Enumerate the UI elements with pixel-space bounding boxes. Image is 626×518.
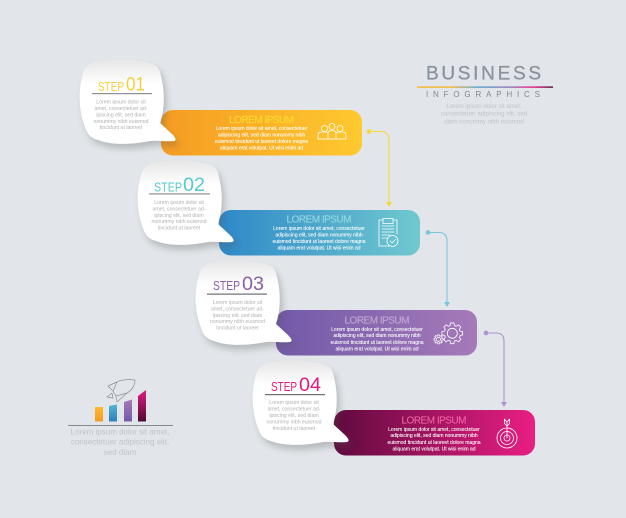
panel: step 1 bubble <box>80 59 179 149</box>
text block: euismod tincidunt ut laoreet dolore magna <box>215 139 308 145</box>
text block <box>93 100 149 131</box>
panel: step 4 bar <box>334 410 535 456</box>
panel: step 2 bubble <box>138 160 237 250</box>
text block: Lorem ipsum dolor sit <box>154 200 204 206</box>
text block: aliquam erat volutpat. Ut wisi enim ad <box>277 246 361 252</box>
step label <box>98 74 145 96</box>
icon: clipboard <box>379 218 398 246</box>
step label <box>154 174 205 196</box>
text block: adipiscing elit, sed diam nonummy nibh <box>218 132 305 138</box>
text block: ipiscing elit, sed diam <box>154 213 204 219</box>
step label: STEP <box>271 380 297 394</box>
text block <box>71 428 169 457</box>
icon: people <box>318 124 346 139</box>
heading: LOREM IPSUM <box>402 415 466 426</box>
step label <box>213 273 264 295</box>
text block: amet, consectetuer ad- <box>152 206 206 212</box>
text block <box>387 427 481 452</box>
text block: sed diam <box>104 448 137 457</box>
text block: tincidunt ut laoreet <box>158 226 201 232</box>
text block: ipiscing elit, sed diam <box>213 313 262 319</box>
text block: Lorem ipsum dolor sit <box>213 300 263 306</box>
icon: rocket <box>107 380 135 402</box>
panel: step 1 bar <box>161 110 362 156</box>
text block <box>330 327 424 352</box>
text block: nonummy nibh euismod <box>93 119 149 125</box>
panel: step 4 bubble <box>253 360 352 450</box>
text block <box>272 226 366 252</box>
text block: euismod tincidunt ut laoreet dolore magna <box>387 440 481 446</box>
text block <box>210 300 265 332</box>
title: business infographics: consectetuer adipiscing elit, sed <box>441 110 527 118</box>
text block: euismod tincidunt ut laoreet dolore magna <box>330 340 424 346</box>
text block: adipiscing elit, sed diam nonummy nibh <box>390 433 478 439</box>
step label: STEP <box>154 180 182 194</box>
text block: amet, consectetuer ad- <box>94 106 148 112</box>
step label <box>271 374 321 396</box>
text block: Lorem ipsum dolor sit amet, consectetuer <box>331 327 423 333</box>
title: business infographics <box>417 64 553 126</box>
panel: step 3 bar <box>276 310 477 356</box>
title: business infographics: INFOGRAPHICS <box>426 90 540 99</box>
text block: tincidunt ut laoreet <box>100 125 143 131</box>
step label: 01 <box>126 74 145 96</box>
text block <box>215 126 308 152</box>
step label: STEP <box>98 80 124 94</box>
text block: Lorem ipsum dolor sit <box>96 100 146 106</box>
text block: ipiscing elit, sed diam <box>269 413 319 419</box>
text block <box>266 400 322 432</box>
icon: gears <box>434 323 463 344</box>
step label: 02 <box>183 174 205 196</box>
panel: step 2 bar <box>219 210 420 256</box>
step label: 03 <box>242 273 264 295</box>
title: business infographics: diam nonummy nibh euismod <box>444 118 524 126</box>
text block: Lorem ipsum dolor sit amet, consectetuer <box>216 126 308 132</box>
text block: adipiscing elit, sed diam nonummy nibh <box>333 333 421 339</box>
text block: Lorem ipsum dolor sit amet, consectetuer <box>388 427 480 433</box>
bar chart <box>95 390 146 422</box>
title: business infographics: BUSINESS <box>426 64 541 84</box>
panel: step 3 bubble <box>196 260 295 350</box>
connector arrow 2 to 3 <box>426 231 450 307</box>
heading: LOREM IPSUM <box>286 215 352 226</box>
text block <box>151 200 207 232</box>
text block: euismod tincidunt ut laoreet dolore magna <box>272 239 366 245</box>
text block: aliquam erat volutpat. Ut wisi enim ad <box>220 146 303 152</box>
step label: STEP <box>213 279 240 293</box>
text block: Lorem ipsum dolor sit amet, consectetuer <box>273 226 365 232</box>
text block: aliquam erat volutpat. Ut wisi enim ad <box>335 346 419 352</box>
text block: consectetuer adipiscing elit, <box>71 438 169 446</box>
connector arrow 1 to 2 <box>367 130 392 207</box>
text block: adipiscing elit, sed diam nonummy nibh <box>275 232 363 238</box>
heading: LOREM IPSUM <box>344 315 410 326</box>
connector arrow 3 to 4 <box>484 331 507 407</box>
text block: nonummy nibh euismod <box>151 219 207 225</box>
icon: target <box>497 419 517 448</box>
text block: amet, consectetuer ad- <box>267 407 321 413</box>
text block: nonummy nibh euismod <box>210 319 265 325</box>
step label: 04 <box>299 374 321 396</box>
title: business infographics: Lorem ipsum dolor sit amet, <box>446 103 522 110</box>
heading: LOREM IPSUM <box>229 115 294 126</box>
text block: tincidunt ut laoreet <box>216 326 259 332</box>
text block: ipiscing elit, sed diam <box>96 112 146 118</box>
text block: aliquam erat volutpat. Ut wisi enim ad <box>392 446 476 452</box>
text block: amet, consectetuer ad- <box>211 306 264 312</box>
text block: nonummy nibh euismod <box>266 419 322 425</box>
text block: tincidunt ut laoreet <box>273 426 316 432</box>
chart: rocket and growth bars <box>68 380 173 457</box>
text block: Lorem ipsum dolor sit amet, <box>71 428 169 436</box>
text block: Lorem ipsum dolor sit <box>269 400 319 406</box>
